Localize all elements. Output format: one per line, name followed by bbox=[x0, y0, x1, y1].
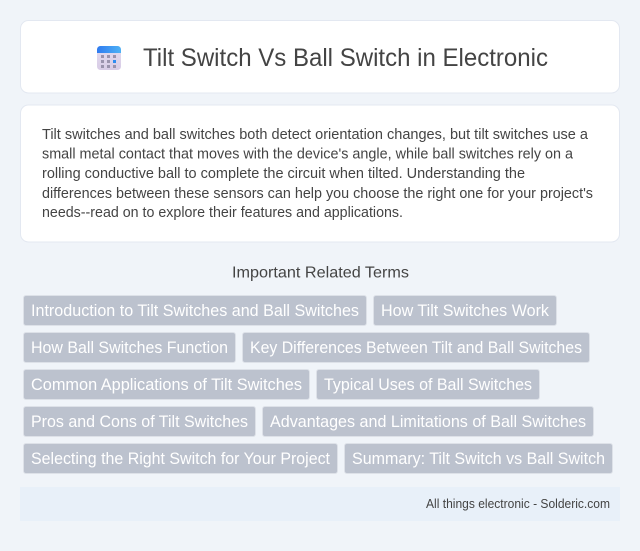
text block: introduction paragraph: rolling conductive ball to complete the circuit when tilted. Understanding the bbox=[42, 166, 525, 182]
tag: advantages and limitations bbox=[262, 406, 594, 436]
heading: important related terms: Important Related Terms bbox=[232, 264, 409, 282]
title: Tilt Switch Vs Ball Switch in Electronic bbox=[143, 44, 548, 72]
tag: common applications bbox=[24, 370, 310, 400]
panel: title header bbox=[20, 20, 620, 93]
tag: selecting the right switch bbox=[24, 444, 338, 474]
tag: key differences bbox=[242, 332, 590, 362]
icon: calendar bbox=[97, 46, 121, 70]
tag: introduction bbox=[24, 296, 366, 326]
tag: typical uses: Typical Uses of Ball Switches bbox=[324, 376, 532, 394]
tag: pros and cons: Pros and Cons of Tilt Switches bbox=[31, 413, 248, 431]
tag: how tilt switches work: How Tilt Switches Work bbox=[381, 302, 550, 320]
tag: key differences: Key Differences Between Tilt and Ball Switches bbox=[250, 339, 582, 357]
text block: introduction paragraph: differences between these sensors can help you choose the right one for your project's bbox=[42, 186, 593, 202]
text block: introduction paragraph: Tilt switches and ball switches both detect orientation changes, but tilt switches use a bbox=[42, 127, 589, 143]
footer credit: All things electronic - Solderic.com bbox=[426, 497, 610, 511]
footer bbox=[20, 487, 620, 521]
panel: related terms tags bbox=[24, 296, 612, 474]
tag: selecting the right switch: Selecting the Right Switch for Your Project bbox=[31, 450, 330, 468]
text block: introduction paragraph bbox=[42, 127, 593, 221]
tag: pros and cons bbox=[24, 406, 256, 436]
text block: introduction paragraph: small metal contact that moves with the device's angle, while ball switches rely on a bbox=[42, 146, 574, 162]
tag: introduction: Introduction to Tilt Switches and Ball Switches bbox=[31, 302, 359, 320]
tag: advantages and limitations: Advantages and Limitations of Ball Switches bbox=[270, 413, 586, 431]
text block: introduction paragraph: needs--read on to explore their features and applications. bbox=[42, 205, 403, 221]
tag: summary bbox=[344, 444, 612, 474]
panel: introduction bbox=[20, 105, 620, 242]
tag: summary: Summary: Tilt Switch vs Ball Switch bbox=[352, 450, 605, 468]
tag: typical uses bbox=[316, 370, 540, 400]
tag: how ball switches function bbox=[24, 332, 236, 362]
tag: how ball switches function: How Ball Switches Function bbox=[31, 339, 228, 357]
tag: how tilt switches work bbox=[374, 296, 556, 326]
tag: common applications: Common Applications of Tilt Switches bbox=[31, 376, 302, 394]
